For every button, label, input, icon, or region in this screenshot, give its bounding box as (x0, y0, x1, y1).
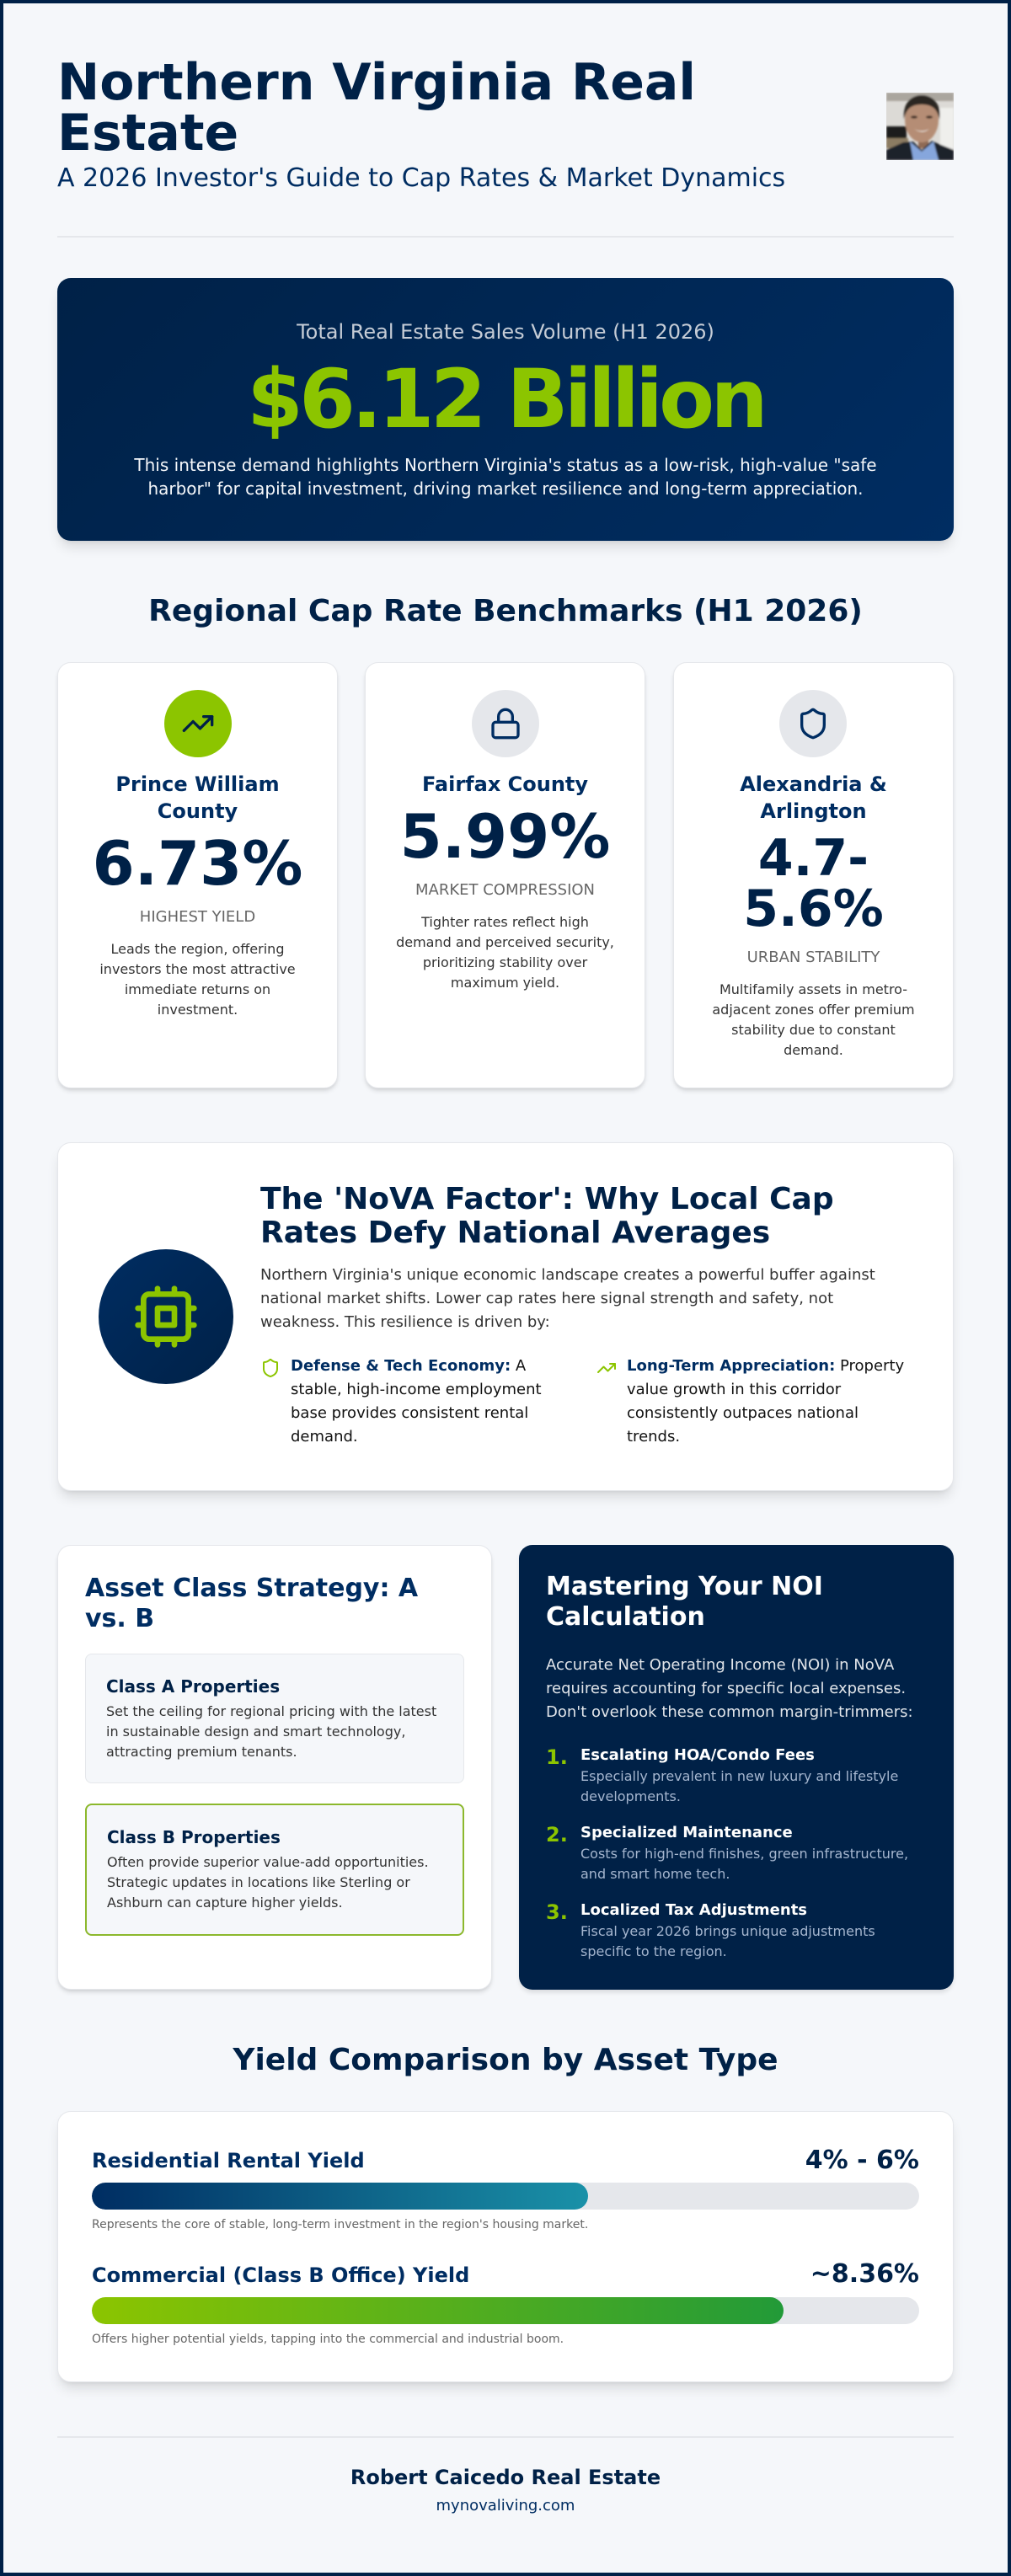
point: appreciation (597, 1357, 904, 1446)
class B text (107, 1854, 429, 1911)
title: Northern Virginia Real (57, 53, 696, 112)
point: appreciation: value growth in this corridor (627, 1381, 841, 1398)
number: 2. (546, 1823, 568, 1846)
description (396, 914, 614, 991)
class B text: Ashburn can capture higher yields. (107, 1895, 343, 1911)
heading: Rates Defy National Averages (260, 1216, 770, 1250)
county name (115, 772, 280, 823)
footer divider (57, 2436, 954, 2438)
point: appreciation: Long-Term Appreciation: Property (627, 1357, 904, 1375)
class B text: Often provide superior value-add opportunities. (107, 1854, 429, 1870)
commercial note: Offers higher potential yields, tapping into the commercial and industrial boom. (92, 2333, 564, 2346)
header divider (57, 236, 954, 238)
author photo (886, 93, 954, 160)
heading: vs. B (85, 1604, 154, 1633)
point: defense and tech: demand. (291, 1428, 358, 1446)
panel: asset class strategy (57, 1545, 492, 1990)
subtitle: A 2026 Investor's Guide to Cap Rates & Market Dynamics (57, 163, 785, 193)
point: defense and tech: stable, high-income employment (291, 1381, 542, 1398)
heading: Asset Class Strategy: A (85, 1574, 418, 1603)
county name: Fairfax County (422, 772, 588, 796)
label: URBAN STABILITY (747, 949, 880, 966)
item text: specific to the region. (580, 1943, 727, 1959)
list item 1 (546, 1745, 898, 1804)
class A title: Class A Properties (106, 1676, 280, 1697)
item title: Specialized Maintenance (580, 1824, 793, 1841)
item title: Escalating HOA/Condo Fees (580, 1746, 815, 1764)
heading (260, 1182, 834, 1250)
list item 3 (546, 1900, 875, 1959)
county name: Prince William (115, 772, 280, 796)
hero description (134, 455, 877, 499)
hero number: $6.12 Billion (247, 352, 764, 446)
heading: Mastering Your NOI (546, 1572, 823, 1601)
intro text (260, 1266, 875, 1331)
commercial value: ~8.36% (810, 2259, 919, 2289)
item text (580, 1846, 908, 1882)
heading: yield comparison: Yield Comparison by Asset Type (233, 2043, 778, 2077)
title (57, 53, 696, 163)
icon: cpu (99, 1249, 233, 1384)
hero description: harbor" for capital investment, driving market resilience and long-term appreciation. (147, 478, 864, 499)
item text: Fiscal year 2026 brings unique adjustments (580, 1923, 875, 1939)
panel: Alexandria & Arlington (673, 662, 954, 1088)
icon: shield (779, 690, 847, 757)
footer company: Robert Caicedo Real Estate (350, 2466, 661, 2489)
label: HIGHEST YIELD (140, 908, 255, 926)
intro text: national market shifts. Lower cap rates here signal strength and safety, not (260, 1290, 833, 1307)
description: Multifamily assets in metro- (719, 981, 907, 997)
description: stability due to constant (731, 1022, 896, 1038)
class A text: attracting premium tenants. (106, 1744, 297, 1760)
description: Tighter rates reflect high (421, 914, 589, 930)
heading (546, 1572, 823, 1632)
icon: shield small (263, 1358, 278, 1377)
point: appreciation: trends. (627, 1428, 680, 1446)
item text: Especially prevalent in new luxury and lifestyle (580, 1768, 898, 1784)
number: 3. (546, 1900, 568, 1924)
intro text (546, 1656, 913, 1721)
hero label: Total Real Estate Sales Volume (H1 2026) (297, 320, 714, 344)
description: prioritizing stability over (423, 954, 587, 970)
heading: The 'NoVA Factor': Why Local Cap (260, 1182, 834, 1216)
description: investors the most attractive (99, 961, 296, 977)
county name: Arlington (760, 799, 867, 823)
description (712, 981, 915, 1058)
cap rate: 6.73% (93, 828, 302, 899)
point: defense and tech: base provides consistent rental (291, 1404, 528, 1422)
class A text: Set the ceiling for regional pricing with the latest (106, 1703, 436, 1719)
description: demand. (784, 1042, 843, 1058)
county name (740, 772, 887, 823)
cap rate: 4.7- (758, 829, 869, 888)
county name: Alexandria & (740, 772, 887, 796)
class B text: Strategic updates in locations like Sterling or (107, 1874, 410, 1890)
intro text: requires accounting for specific local expenses. (546, 1680, 906, 1697)
point: defense and tech (263, 1357, 542, 1446)
item text: developments. (580, 1788, 681, 1804)
heading: Calculation (546, 1602, 705, 1632)
point: defense and tech: Defense & Tech Economy: A (291, 1357, 526, 1375)
item text (580, 1768, 898, 1804)
county name: County (158, 799, 238, 823)
hero description: This intense demand highlights Northern Virginia's status as a low-risk, high-value "safe (134, 455, 877, 475)
panel: NoVA factor (57, 1142, 954, 1491)
description (99, 941, 296, 1018)
commercial label: Commercial (Class B Office) Yield (92, 2263, 469, 2287)
label: MARKET COMPRESSION (415, 881, 595, 899)
heading (85, 1574, 418, 1633)
item text (580, 1923, 875, 1959)
title: Estate (57, 104, 238, 163)
panel: Fairfax County (365, 662, 645, 1088)
residential label: Residential Rental Yield (92, 2149, 365, 2172)
panel: yield comparison chart (57, 2111, 954, 2382)
class A text: in sustainable design and smart technology, (106, 1724, 405, 1740)
cap rate (743, 829, 884, 938)
intro text: weakness. This resilience is driven by: (260, 1313, 550, 1331)
description: Leads the region, offering (111, 941, 284, 957)
intro text: Accurate Net Operating Income (NOI) in NoVA (546, 1656, 894, 1674)
class B title: Class B Properties (107, 1827, 281, 1847)
residential value: 4% - 6% (805, 2146, 919, 2175)
commercial bar (92, 2297, 919, 2324)
cap rate: 5.99% (400, 801, 610, 872)
description: adjacent zones offer premium (712, 1002, 915, 1018)
panel: Prince William County (57, 662, 338, 1088)
icon: lock (472, 690, 539, 757)
class A text (106, 1703, 436, 1760)
number: 1. (546, 1745, 568, 1769)
description: maximum yield. (451, 975, 559, 991)
description: investment. (158, 1002, 238, 1018)
intro text: Northern Virginia's unique economic landscape creates a powerful buffer against (260, 1266, 875, 1284)
residential bar (92, 2183, 919, 2210)
list item 2 (546, 1823, 908, 1882)
intro text: Don't overlook these common margin-trimmers: (546, 1703, 913, 1721)
class A box (85, 1654, 464, 1783)
residential note: Represents the core of stable, long-term investment in the region's housing market. (92, 2218, 588, 2231)
point: appreciation: consistently outpaces national (627, 1404, 859, 1422)
item title: Localized Tax Adjustments (580, 1901, 807, 1919)
description: immediate returns on (125, 981, 270, 997)
heading: cap rates: Regional Cap Rate Benchmarks (H1 2026) (148, 594, 863, 628)
description: demand and perceived security, (396, 934, 614, 950)
panel: hero stat (57, 278, 954, 541)
class B box (85, 1804, 464, 1936)
panel: NOI calculation (519, 1545, 954, 1990)
cap rate: 5.6% (743, 879, 884, 938)
icon: trending up (164, 690, 232, 757)
footer website: mynovaliving.com (436, 2497, 575, 2515)
item text: and smart home tech. (580, 1866, 730, 1882)
item text: Costs for high-end finishes, green infrastructure, (580, 1846, 908, 1862)
icon: trend small (597, 1363, 616, 1373)
